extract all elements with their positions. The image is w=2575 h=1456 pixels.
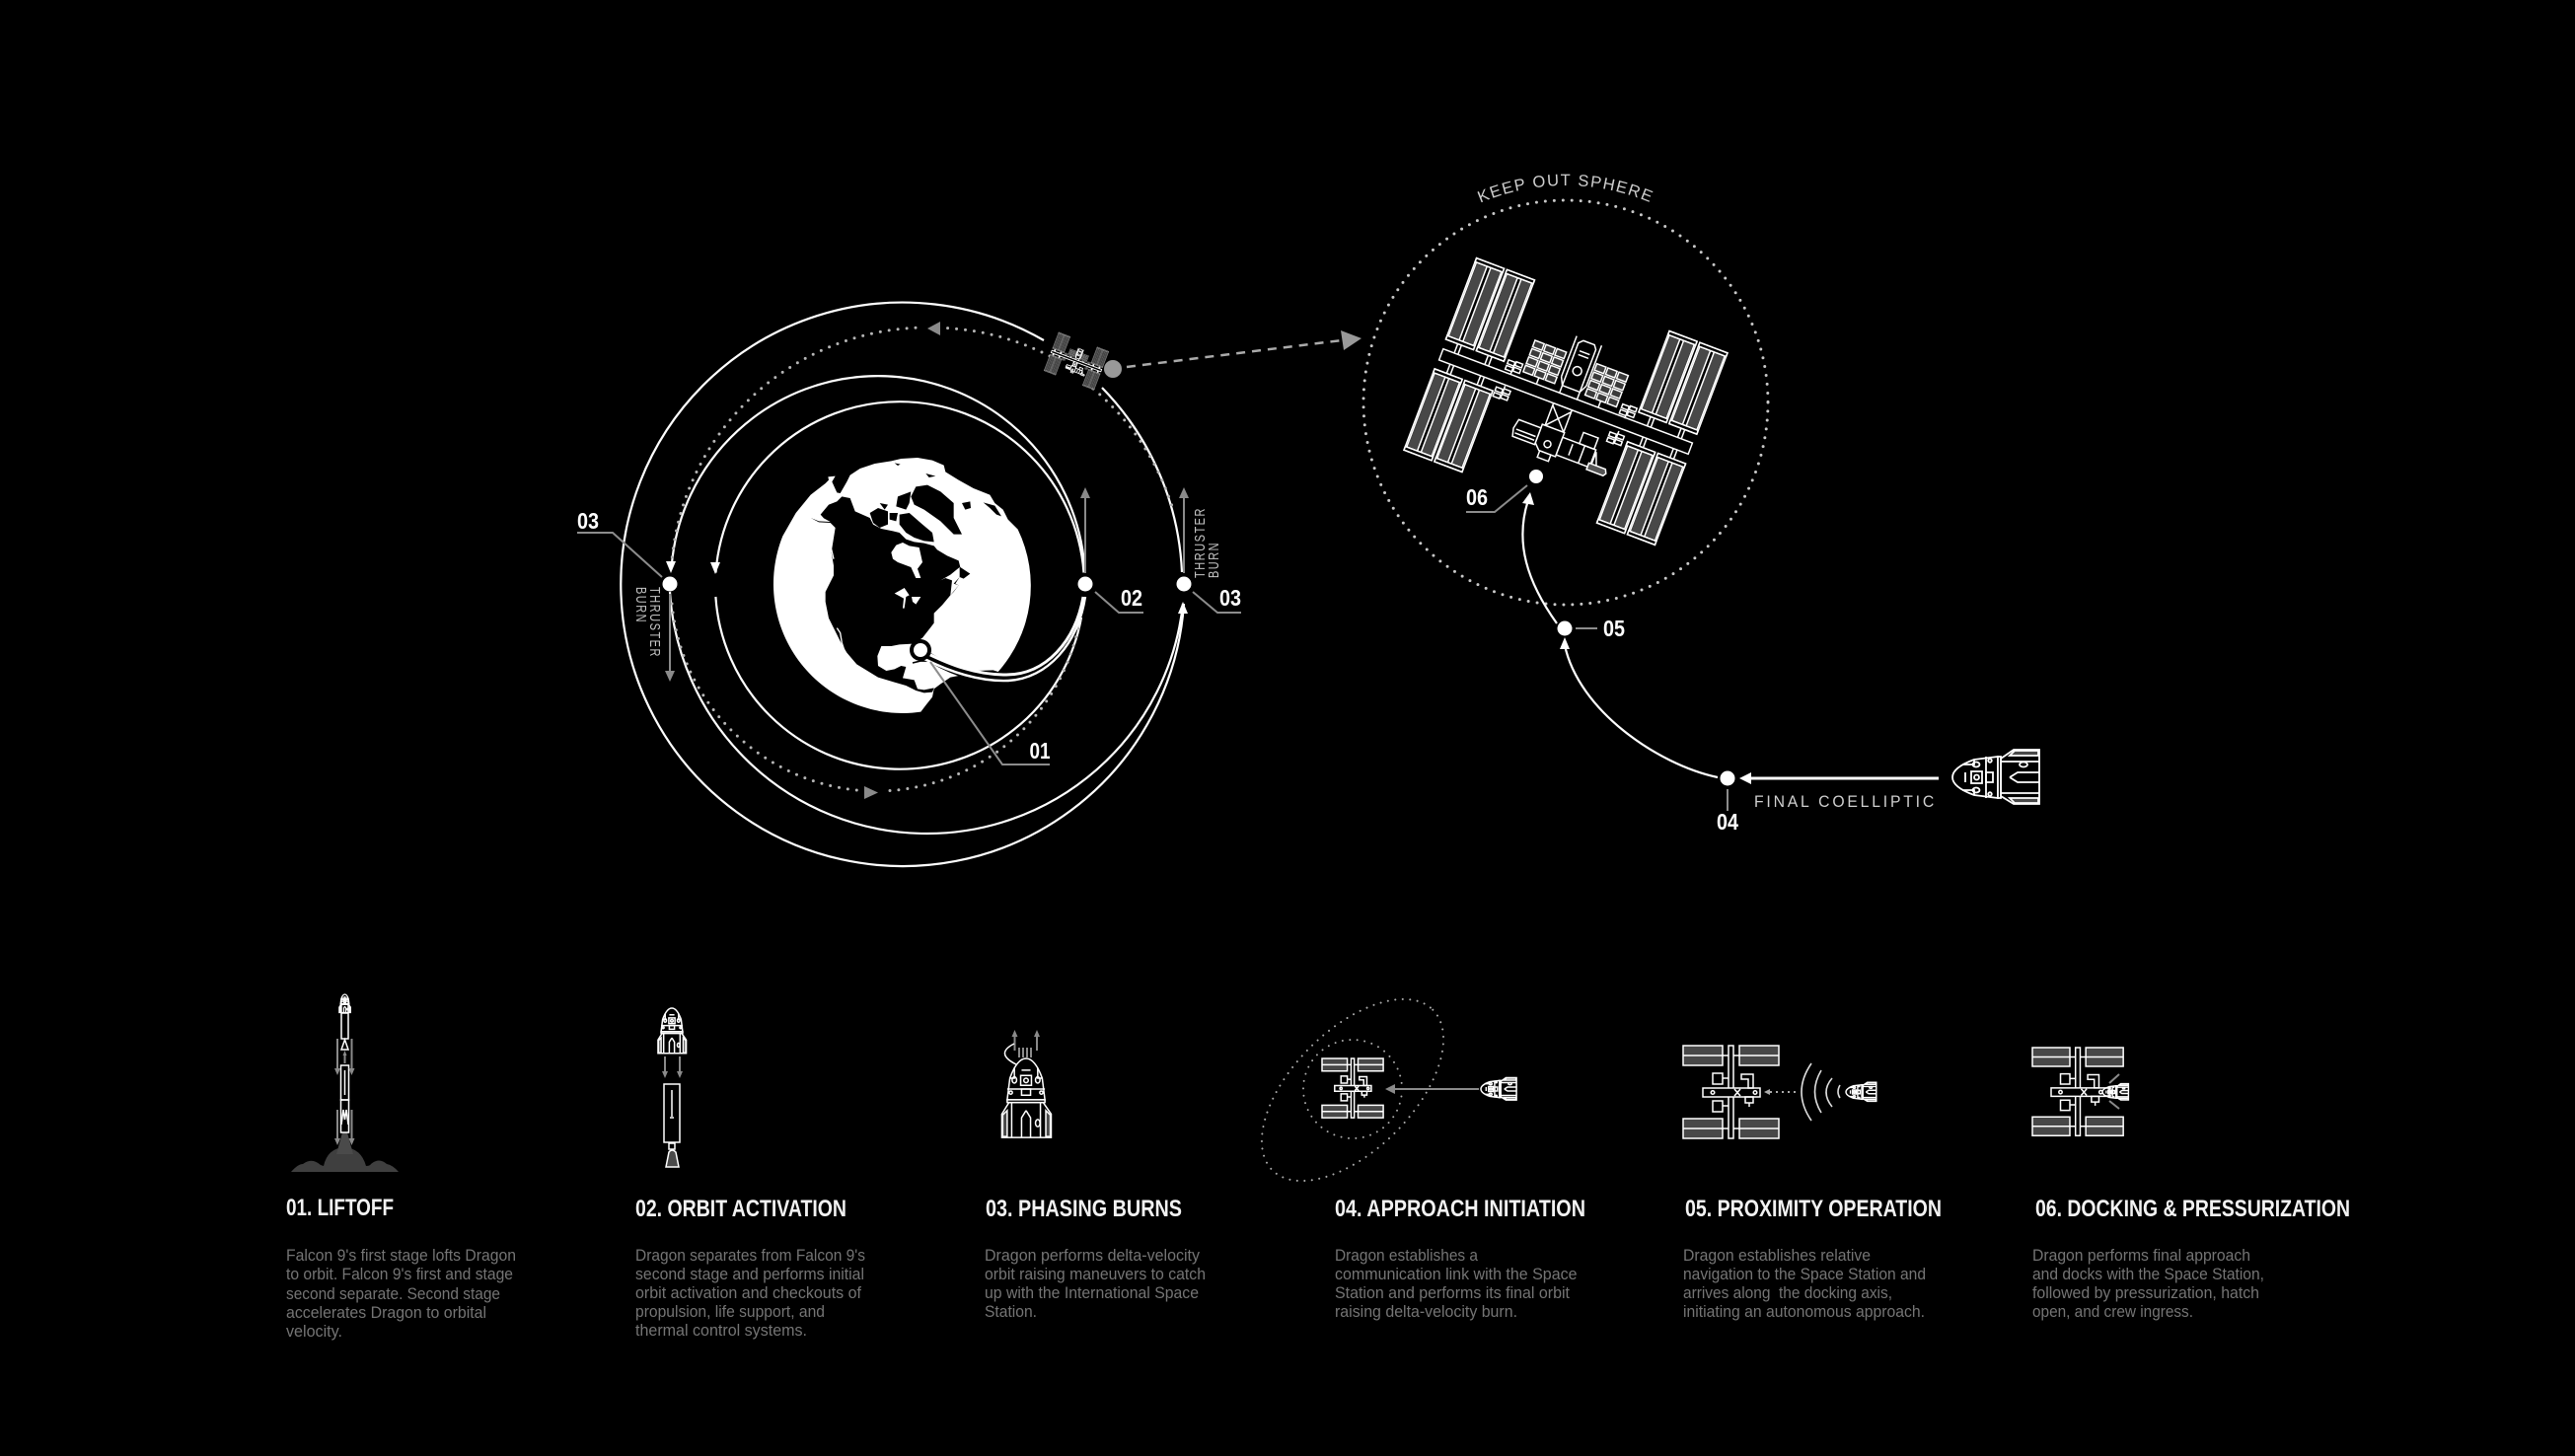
arrows: thruster burn — [665, 487, 1189, 682]
step 05 text: navigation to the Space Station and — [1683, 1265, 1926, 1283]
icon: earth — [773, 458, 1031, 713]
orbit: third phasing orbit — [670, 592, 1183, 834]
step 04 text: raising delta-velocity burn. — [1335, 1302, 1517, 1321]
dotted orbit paths — [672, 328, 1174, 791]
step 01 text: velocity. — [286, 1322, 342, 1341]
step 01 text: second separate. Second stage — [286, 1284, 500, 1303]
docking diagram — [1361, 174, 2040, 835]
step 03 text: 03. PHASING BURNS — [986, 1196, 1182, 1222]
label: thruster burn left: THRUSTER — [646, 587, 662, 658]
waypoint 05 with label — [1557, 616, 1625, 641]
leader and label 01: 01 — [1030, 738, 1050, 764]
label: final coelliptic: FINAL COELLIPTIC — [1754, 792, 1937, 811]
waypoint 05 with label: 05 — [1603, 616, 1625, 641]
step 01 icon: rocket liftoff — [291, 994, 399, 1172]
leader and label 03 right — [1193, 585, 1241, 613]
step 01 text: accelerates Dragon to orbital — [286, 1303, 486, 1322]
orbit diagram — [577, 303, 1361, 866]
step 06 text — [2032, 1196, 2350, 1321]
ISS target marker and dashed connector — [1104, 330, 1361, 378]
label: thruster burn right: THRUSTER — [1193, 507, 1209, 578]
step 01 text — [286, 1195, 516, 1341]
step 02 text: second stage and performs initial — [635, 1265, 864, 1283]
step 01 text: Falcon 9's first stage lofts Dragon — [286, 1246, 516, 1265]
step 02 icon: stage separation — [658, 1008, 687, 1167]
orbit: outer orbit — [621, 303, 1184, 866]
step 05 text: arrives along the docking axis, — [1683, 1283, 1892, 1302]
orbit: second phasing orbit — [672, 376, 1084, 566]
launch point marker — [910, 639, 931, 661]
step 02 text — [635, 1196, 865, 1340]
leader and label 02: 02 — [1121, 585, 1142, 611]
step 04 text: Dragon establishes a — [1335, 1246, 1478, 1265]
waypoint 06 with label: 06 — [1466, 484, 1488, 510]
step 05 text: initiating an autonomous approach. — [1683, 1302, 1925, 1321]
step 05 text: 05. PROXIMITY OPERATION — [1685, 1196, 1942, 1222]
label: keep out sphere: KEEP OUT SPHERE — [1478, 174, 1654, 203]
step 05 text — [1683, 1196, 1942, 1321]
trajectory: 05 to 06 — [1522, 492, 1557, 623]
step 02 text: thermal control systems. — [635, 1321, 807, 1340]
step 04 text: 04. APPROACH INITIATION — [1335, 1196, 1585, 1222]
launch trajectory — [922, 597, 1085, 681]
leader and label 02 — [1095, 585, 1143, 613]
step 06 icon: docking — [2032, 1048, 2128, 1135]
step 04 text: Station and performs its final orbit — [1335, 1283, 1570, 1302]
leader and label 03 left — [577, 508, 662, 577]
step 06 text: followed by pressurization, hatch — [2032, 1283, 2259, 1302]
step 05 text: Dragon establishes relative — [1683, 1246, 1871, 1265]
label: thruster burn right — [1193, 507, 1222, 578]
trajectory: 04 to 05 — [1560, 637, 1718, 777]
step 02 text: orbit activation and checkouts of — [635, 1283, 861, 1302]
step 06 text: 06. DOCKING & PRESSURIZATION — [2035, 1196, 2350, 1222]
orbit nodes — [663, 576, 1192, 592]
final coelliptic arrow — [1739, 772, 1939, 784]
step 06 text: Dragon performs final approach — [2032, 1246, 2250, 1265]
step 03 text — [985, 1196, 1206, 1321]
step 03 text: orbit raising maneuvers to catch — [985, 1265, 1206, 1283]
step 01 text: 01. LIFTOFF — [286, 1195, 394, 1221]
leader and label 01 — [930, 662, 1050, 764]
step 02 text: 02. ORBIT ACTIVATION — [635, 1196, 846, 1222]
waypoint 06 with label — [1466, 470, 1543, 512]
label: thruster burn right: BURN — [1207, 542, 1222, 578]
waypoint 04 with label — [1717, 771, 1738, 835]
icon: dragon spacecraft — [1952, 750, 2039, 804]
waypoint 04 with label: 04 — [1717, 809, 1738, 835]
step 03 text: up with the International Space — [985, 1283, 1199, 1302]
leader and label 03 right: 03 — [1219, 585, 1241, 611]
step 02 text: propulsion, life support, and — [635, 1302, 825, 1321]
step 03 text: Station. — [985, 1302, 1037, 1321]
label: thruster burn left: BURN — [632, 587, 648, 623]
step 03 icon: phasing burn — [1001, 1030, 1051, 1137]
step 06 text: and docks with the Space Station, — [2032, 1265, 2264, 1283]
step 04 text — [1335, 1196, 1585, 1321]
leader and label 03 left: 03 — [577, 508, 599, 534]
step 04 icon: approach ellipses, station and dragon — [1230, 968, 1516, 1212]
label: thruster burn left — [632, 587, 662, 658]
orbit: innermost parking orbit — [715, 401, 1083, 769]
step 05 icon: proximity operation — [1683, 1046, 1876, 1138]
step 02 text: Dragon separates from Falcon 9's — [635, 1246, 865, 1265]
icon: small space station — [1044, 332, 1109, 390]
icon: space station — [1404, 258, 1728, 545]
arrows: orbit direction — [666, 322, 1188, 799]
step 04 text: communication link with the Space — [1335, 1265, 1577, 1283]
step 06 text: open, and crew ingress. — [2032, 1302, 2193, 1321]
keep out sphere — [1363, 200, 1768, 605]
step 03 text: Dragon performs delta-velocity — [985, 1246, 1200, 1265]
step 01 text: to orbit. Falcon 9's first and stage — [286, 1265, 513, 1283]
